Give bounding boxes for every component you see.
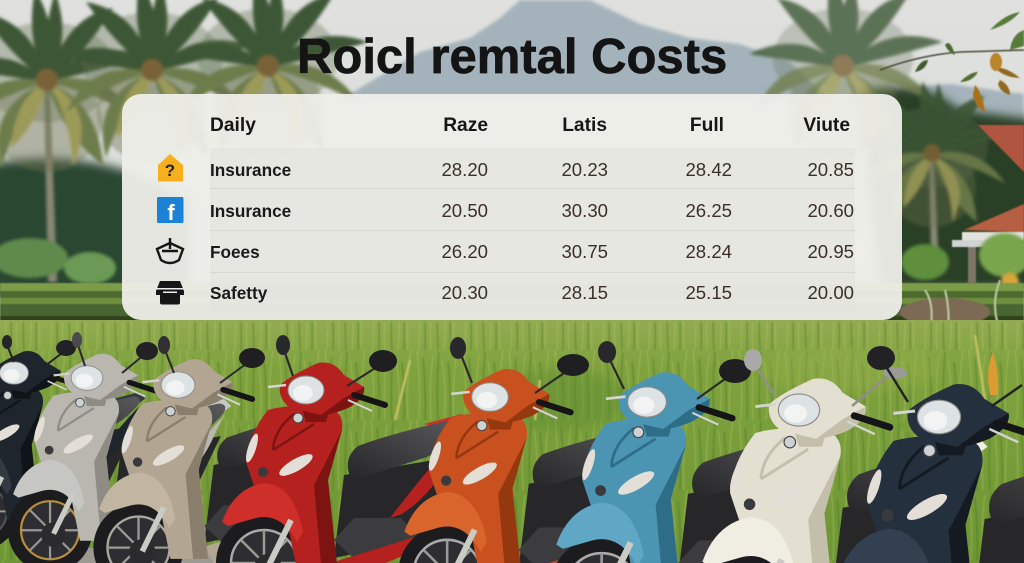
row: insurance 1: Insurance (210, 160, 291, 180)
row: insurance 1 (158, 154, 854, 182)
title: Roicl remtal Costs (297, 30, 727, 84)
table header row (210, 115, 850, 136)
background: branch with leaves (880, 12, 1024, 112)
scooter: orange (398, 337, 657, 563)
row: insurance 1: 20.85 (807, 159, 854, 180)
background: foreground foliage (0, 233, 1024, 291)
scooter: silver (8, 332, 231, 563)
icon: blue square with f: f (167, 200, 175, 225)
row: insurance 2: 20.50 (441, 200, 488, 221)
background: sky (0, 0, 1024, 330)
row: foees (157, 238, 854, 263)
table header row: Viute (803, 115, 850, 136)
scooter: red (216, 335, 470, 563)
panel background (122, 94, 902, 320)
row: foees: 28.24 (685, 241, 732, 262)
table body shade (210, 148, 855, 313)
scooter: beige (93, 336, 332, 563)
table header row: Raze (443, 115, 488, 136)
background: palm trees (0, 0, 1012, 282)
table header row: Daily (210, 115, 256, 136)
row: insurance 1: 28.42 (685, 159, 732, 180)
table header row: Full (690, 115, 724, 136)
row: insurance 2: Insurance (210, 201, 291, 221)
background: tree mass right (860, 87, 1024, 290)
scooter: blue (550, 341, 824, 563)
row: safety: 20.00 (807, 282, 854, 303)
row: safety (156, 281, 854, 304)
row: safety: 25.15 (685, 282, 732, 303)
row: safety: 20.30 (441, 282, 488, 303)
background: rice field (0, 320, 1024, 563)
icon: blue square with f (157, 197, 184, 225)
background: terraced rice bands (0, 280, 1024, 330)
icon: black box (156, 281, 184, 304)
row: foees: 30.75 (561, 241, 608, 262)
icon: yellow house with question mark (158, 154, 183, 182)
row: insurance 2: 20.60 (807, 200, 854, 221)
icon: yellow house with question mark: ? (165, 161, 175, 180)
row: foees: 26.20 (441, 241, 488, 262)
scooter: navy black (831, 346, 1024, 563)
row: insurance 2 (157, 197, 854, 225)
background: mountain (340, 0, 830, 100)
row: foees: 20.95 (807, 241, 854, 262)
table header row: Latis (562, 115, 607, 136)
row: foees: Foees (210, 242, 260, 262)
row: insurance 2: 26.25 (685, 200, 732, 221)
row: insurance 2: 30.30 (561, 200, 608, 221)
background: tree mass left (0, 159, 190, 295)
background: distant ridge right (900, 84, 1024, 130)
scooter: cream (696, 349, 988, 563)
panel: rental cost table (122, 94, 902, 320)
background: red roofs and house (952, 125, 1024, 283)
row: insurance 1: 28.20 (441, 159, 488, 180)
icon: pot with lid (157, 238, 183, 263)
scooter: black far left (0, 335, 145, 550)
row: safety: Safetty (210, 283, 268, 303)
row: safety: 28.15 (561, 282, 608, 303)
row: insurance 1: 20.23 (561, 159, 608, 180)
